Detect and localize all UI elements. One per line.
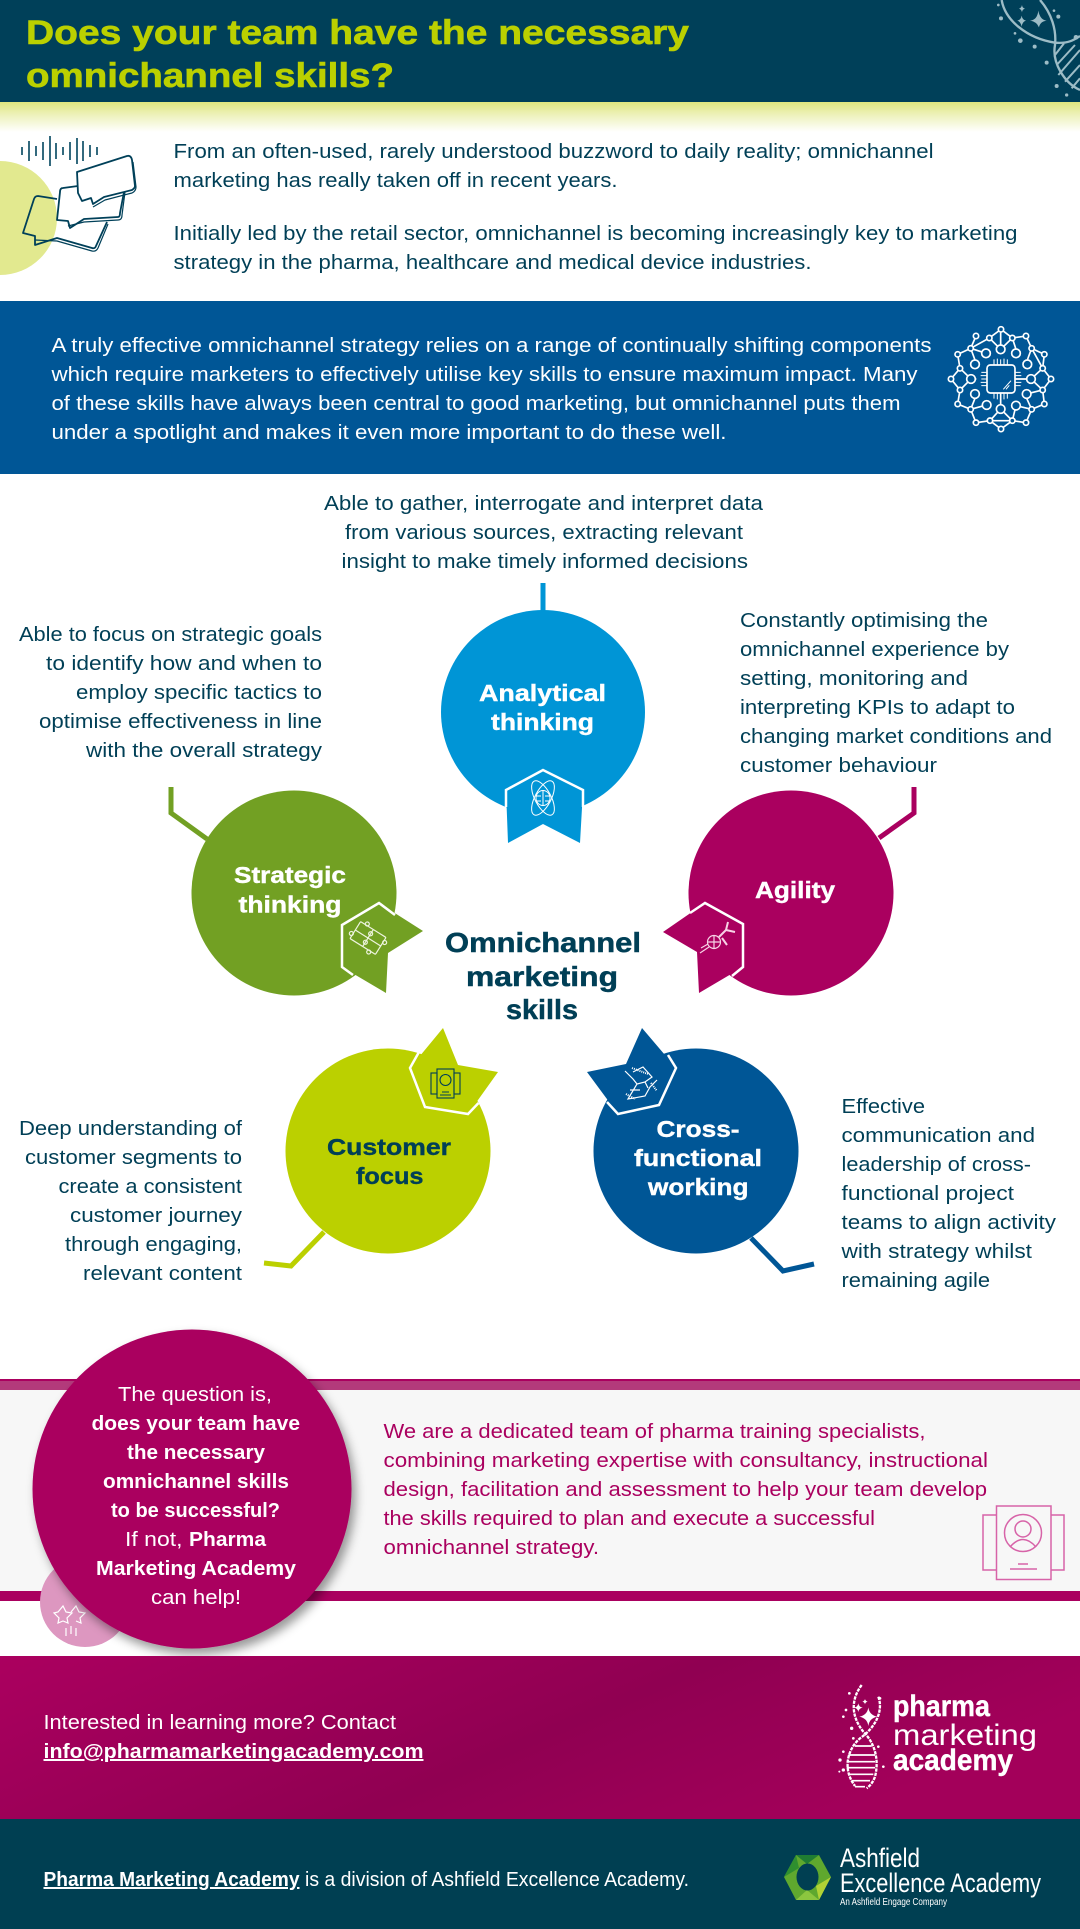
sound wave <box>22 136 97 166</box>
label: focus <box>356 1163 424 1189</box>
wordmark <box>840 1843 1041 1908</box>
badge <box>410 1028 498 1114</box>
badge <box>587 1028 676 1114</box>
icon: green gem <box>784 1855 831 1900</box>
text: agility description: omnichannel experience by <box>740 639 1009 661</box>
callout circle: can help! <box>151 1587 241 1609</box>
center heading: marketing <box>466 961 618 992</box>
text: analytical description: Able to gather, interrogate and interpret data <box>324 493 764 515</box>
logo: Ashfield Excellence Academy <box>784 1843 1041 1908</box>
text: customer description: customer journey <box>70 1205 242 1227</box>
panel: blue strategy statement <box>0 301 1080 474</box>
badge <box>342 903 423 993</box>
contact text <box>44 1712 424 1763</box>
callout circle: to be successful? <box>111 1500 280 1522</box>
icon: profile certificate <box>983 1506 1064 1580</box>
text: cross-functional description: remaining agile <box>842 1270 990 1292</box>
text: customer description: Deep understanding of <box>19 1118 242 1140</box>
skill: Customer focus <box>264 1028 498 1266</box>
wordmark: pharma <box>893 1690 990 1723</box>
wordmark <box>893 1690 1037 1777</box>
text: about the team: combining marketing expertise with consultancy, instructional <box>384 1450 988 1472</box>
callout circle: does your team have <box>92 1413 300 1435</box>
title: Does your team have the necessary <box>26 14 689 52</box>
text: about the team: We are a dedicated team of pharma training specialists, <box>384 1421 926 1443</box>
text: about the team: design, facilitation and assessment to help your team develop <box>384 1479 987 1501</box>
intro text <box>174 141 1018 274</box>
callout circle: Marketing Academy <box>96 1558 297 1580</box>
lime gradient strip <box>0 102 1080 132</box>
contact text: info@pharmamarketingacademy.com <box>44 1741 424 1763</box>
skill: Agility <box>663 787 914 996</box>
text: agility description: interpreting KPIs to adapt to <box>740 697 1015 719</box>
wordmark: marketing <box>893 1719 1037 1752</box>
callout circle: the necessary <box>127 1442 266 1464</box>
wordmark: academy <box>893 1744 1013 1777</box>
callout circle <box>32 1330 352 1648</box>
title <box>26 14 689 95</box>
text: customer description: relevant content <box>83 1263 242 1285</box>
text: about the team: omnichannel strategy. <box>384 1537 599 1559</box>
badge <box>506 770 583 843</box>
text: strategic description: Able to focus on strategic goals <box>19 624 322 646</box>
icon: DNA <box>838 1685 885 1788</box>
statement text: which require marketers to effectively utilise key skills to ensure maximum impact. Many <box>50 364 917 386</box>
center heading: Omnichannel <box>445 927 641 958</box>
text: agility description: changing market conditions and <box>740 726 1052 748</box>
label <box>234 862 346 918</box>
icon: certificate <box>431 1069 460 1098</box>
statement text: of these skills have always been central to good marketing, but omnichannel puts them <box>52 393 900 415</box>
callout circle: If not, <box>125 1529 182 1551</box>
statement text: under a spotlight and makes it even more important to do these well. <box>52 422 726 444</box>
label: Strategic <box>234 862 346 888</box>
intro text: strategy in the pharma, healthcare and medical device industries. <box>174 252 812 274</box>
icon: DNA helix decoration <box>997 0 1080 97</box>
text: analytical description: insight to make timely informed decisions <box>342 551 748 573</box>
icon: chip network <box>948 327 1054 432</box>
statement text: A truly effective omnichannel strategy relies on a range of continually shifting components <box>52 335 932 357</box>
panel: division footer <box>0 1819 1080 1929</box>
text: cross-functional description <box>840 1096 1056 1292</box>
text: customer description: through engaging, <box>65 1234 242 1256</box>
center heading <box>445 927 641 1025</box>
icon: joined hands <box>625 1067 657 1099</box>
header panel <box>0 0 1080 102</box>
text: strategic description <box>19 624 322 762</box>
text: customer description: create a consistent <box>58 1176 242 1198</box>
text: agility description <box>740 610 1052 777</box>
skill: Cross-functional working <box>587 1028 814 1271</box>
label: thinking <box>491 709 594 735</box>
contact text: Interested in learning more? Contact <box>44 1712 396 1734</box>
icon: puzzle <box>345 917 391 959</box>
bubbles <box>23 156 136 251</box>
label <box>327 1134 451 1189</box>
skill: Analytical thinking <box>441 583 645 843</box>
panel: question section <box>0 1330 1080 1648</box>
text: analytical description <box>324 493 764 573</box>
text: cross-functional description: teams to align activity <box>842 1212 1056 1234</box>
label: Cross- <box>656 1116 740 1142</box>
division text: is a division of Ashfield Excellence Academy. <box>305 1869 689 1891</box>
statement text <box>50 335 931 444</box>
icon: brain atom <box>527 777 559 819</box>
text: customer description: customer segments to <box>25 1147 242 1169</box>
division text: Pharma Marketing Academy <box>44 1869 300 1891</box>
callout circle: Pharma <box>189 1529 267 1551</box>
text: strategic description: to identify how and when to <box>46 653 322 675</box>
label: thinking <box>238 892 342 918</box>
title: omnichannel skills? <box>26 57 394 95</box>
intro text: From an often-used, rarely understood buzzword to daily reality; omnichannel <box>174 141 933 163</box>
icon: speech bubbles <box>0 136 136 275</box>
text: agility description: customer behaviour <box>740 755 937 777</box>
wordmark: Ashfield <box>840 1843 920 1873</box>
text: cross-functional description: leadership of cross- <box>842 1154 1031 1176</box>
icon: athlete and globe <box>700 922 735 953</box>
label: Analytical <box>479 680 606 706</box>
badge <box>663 903 743 993</box>
text: cross-functional description: communication and <box>842 1125 1035 1147</box>
division text <box>44 1869 689 1891</box>
label: working <box>647 1174 748 1200</box>
small pink circle icon <box>40 1557 130 1647</box>
label <box>634 1116 762 1200</box>
label <box>479 680 606 735</box>
callout circle: The question is, <box>118 1384 272 1406</box>
intro text: marketing has really taken off in recent years. <box>174 170 618 192</box>
text: customer description <box>19 1118 242 1285</box>
text: agility description: setting, monitoring and <box>740 668 968 690</box>
label: Customer <box>327 1134 451 1160</box>
text: analytical description: from various sources, extracting relevant <box>345 522 743 544</box>
skill: Strategic thinking <box>171 787 423 996</box>
wordmark: An Ashfield Engage Company <box>840 1897 947 1908</box>
text: cross-functional description: functional project <box>842 1183 1015 1205</box>
text: agility description: Constantly optimising the <box>740 610 988 632</box>
text: cross-functional description: Effective <box>842 1096 925 1118</box>
center heading: skills <box>506 994 578 1025</box>
intro text: Initially led by the retail sector, omnichannel is becoming increasingly key to marketing <box>174 223 1018 245</box>
lime circle <box>0 161 57 275</box>
text: cross-functional description: with strategy whilst <box>840 1241 1032 1263</box>
callout circle: omnichannel skills <box>103 1471 289 1493</box>
text: about the team <box>384 1421 988 1559</box>
text: about the team: the skills required to plan and execute a successful <box>384 1508 875 1530</box>
label: functional <box>634 1145 762 1171</box>
panel: contact footer <box>0 1656 1080 1819</box>
text: strategic description: employ specific tactics to <box>76 682 322 704</box>
text: strategic description: with the overall strategy <box>85 740 322 762</box>
logo: pharma marketing academy <box>838 1685 1037 1788</box>
label: Agility <box>755 877 835 903</box>
text: strategic description: optimise effectiveness in line <box>39 711 322 733</box>
